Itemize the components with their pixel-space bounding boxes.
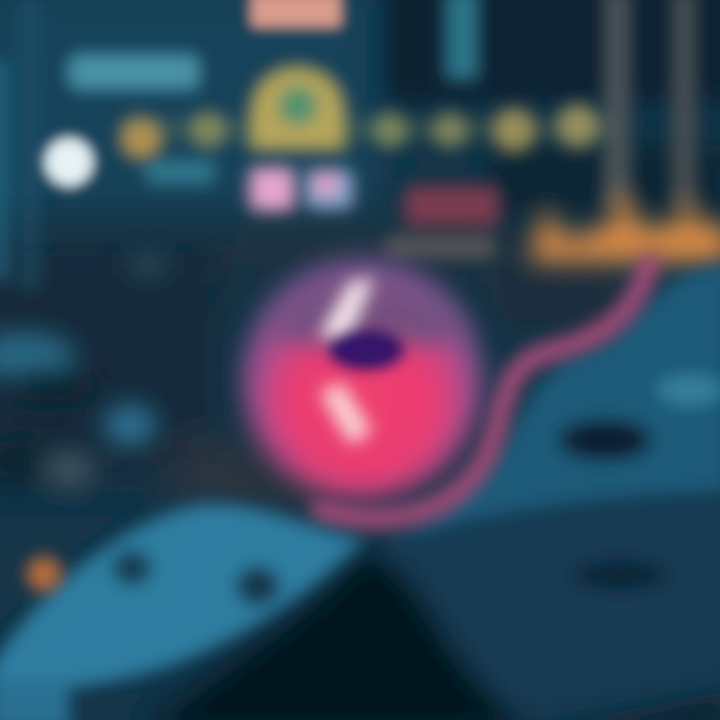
row of gold icons	[120, 105, 610, 159]
orange marker	[27, 557, 61, 591]
lower left blue land	[0, 504, 365, 720]
dark mountain foreground	[150, 559, 720, 720]
lower right blue land	[380, 262, 720, 720]
dark spots on land	[561, 374, 720, 589]
left blue patches	[0, 253, 168, 488]
central gold arch icon	[250, 66, 345, 150]
orange flames at column base	[530, 185, 720, 262]
pink and blue tiles	[250, 168, 352, 210]
light blue heading bar	[68, 54, 200, 90]
subheading bar	[145, 160, 215, 184]
circle outer top tint	[270, 282, 465, 345]
main pink circle	[242, 258, 482, 498]
vertical columns	[0, 0, 696, 290]
crimson label	[385, 186, 499, 258]
white glowing dot	[44, 137, 94, 187]
dark spots on left land	[114, 552, 278, 604]
lower white highlight	[320, 383, 372, 444]
top pink label	[250, 0, 342, 28]
pink wave line	[320, 262, 650, 519]
upper white highlight	[320, 278, 374, 345]
panel: upper left backdrop	[0, 0, 540, 510]
white highlights and purple core	[320, 278, 404, 444]
panel: upper right dark backdrop	[390, 0, 720, 330]
purple core	[328, 329, 404, 371]
